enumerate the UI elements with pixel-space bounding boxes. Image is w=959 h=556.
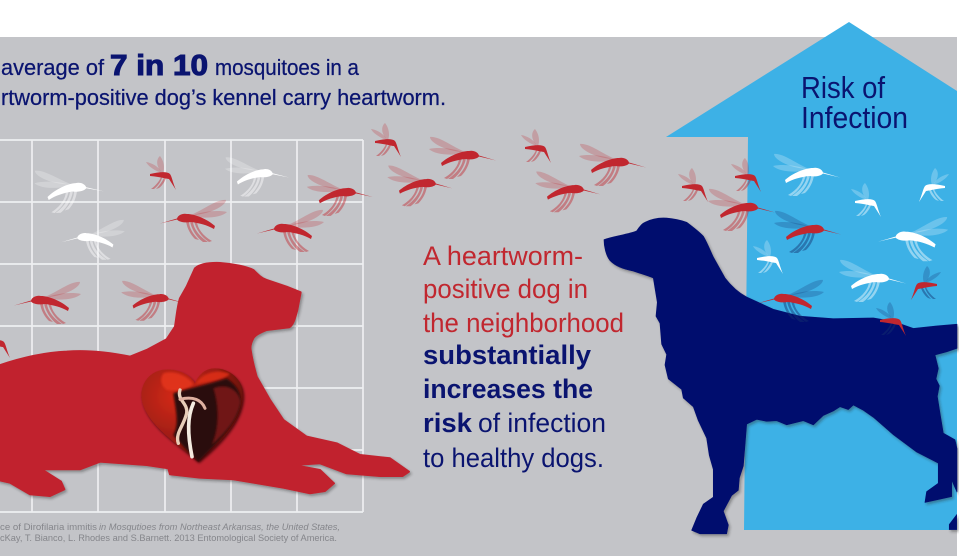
heading: 7 in 10 statistic: mosquitoes in a: [215, 55, 360, 80]
panel: infection risk arrow house: [666, 22, 957, 530]
heading: 7 in 10 statistic: rtworm-positive dog’s kennel carry heartworm.: [1, 85, 446, 110]
icon: red mosquito: [121, 281, 185, 321]
icon: white mosquito: [225, 155, 290, 197]
icon: red mosquito: [257, 210, 324, 252]
icon: red mosquito: [731, 158, 761, 192]
icon: white mosquito: [839, 260, 906, 302]
icon: red lying dog silhouette: [0, 263, 409, 496]
text block: neighborhood risk message: increases the: [423, 374, 593, 404]
icon: red mosquito: [14, 282, 81, 324]
text block: neighborhood risk message: [423, 241, 624, 473]
icon: red mosquito with dark wings: [876, 302, 906, 336]
icon: red mosquito: [307, 174, 373, 216]
icon: heart with heartworms: [141, 368, 243, 462]
footnote: study citation: [0, 522, 340, 544]
icon: red mosquito: [0, 324, 10, 358]
icon: red mosquito: [521, 129, 551, 163]
icon: white mosquito: [878, 217, 948, 261]
icon: red mosquito: [579, 144, 646, 186]
text block: neighborhood risk message: positive dog in: [423, 274, 588, 304]
icon: red mosquito: [160, 200, 227, 242]
icon: white mosquito: [61, 220, 125, 260]
icon: red mosquito: [146, 156, 176, 190]
heading: risk of infection: Risk of: [801, 70, 885, 105]
icon: white mosquito: [851, 183, 881, 217]
icon: red mosquito: [371, 123, 401, 157]
text block: neighborhood risk message: A heartworm-: [423, 241, 583, 271]
footnote: study citation: cKay, T. Bianco, L. Rhodes and S.Barnett. 2013 Entomological Society of America.: [0, 533, 337, 544]
icon: white mosquito: [34, 167, 105, 214]
icon: red mosquito with dark wings: [911, 266, 941, 300]
icon: white mosquito: [773, 154, 840, 196]
footnote: study citation: in Mosqutioes from Northeast Arkansas, the United States,: [99, 522, 340, 533]
mosquitoes inside the house, behind the dog: [753, 154, 949, 302]
heading: 7 in 10 statistic: average of: [1, 55, 105, 80]
icon: red mosquito: [708, 189, 775, 231]
icon: red mosquito: [429, 137, 496, 179]
text block: neighborhood risk message: to healthy dogs.: [423, 443, 604, 473]
heading: 7 in 10 statistic: [1, 50, 446, 110]
icon: red mosquito with dark wings: [774, 211, 841, 253]
icon: red mosquito: [678, 168, 708, 202]
heading: risk of infection: Infection: [801, 100, 908, 135]
mosquitoes landing on the navy dog: [757, 280, 906, 336]
text block: neighborhood risk message: of infection: [478, 408, 606, 438]
text block: neighborhood risk message: the neighborhood: [423, 308, 624, 338]
icon: white mosquito: [919, 168, 949, 202]
icon: red mosquito: [535, 171, 600, 212]
footnote: study citation: ce of Dirofilaria immitis: [0, 522, 97, 533]
mosquitoes over the grid: [0, 155, 373, 358]
icon: white mosquito: [753, 240, 783, 274]
mosquitoes flying across the gap: [371, 123, 775, 231]
heading: risk of infection: [801, 70, 908, 135]
icon: navy standing dog silhouette: [604, 218, 957, 534]
icon: red mosquito with dark wings: [757, 280, 824, 322]
text block: neighborhood risk message: risk: [423, 408, 473, 438]
grid chart behind the red dog: [0, 140, 363, 512]
heading: 7 in 10 statistic: 7 in 10: [110, 50, 208, 82]
text block: neighborhood risk message: substantially: [423, 340, 591, 370]
icon: red mosquito: [387, 165, 452, 206]
